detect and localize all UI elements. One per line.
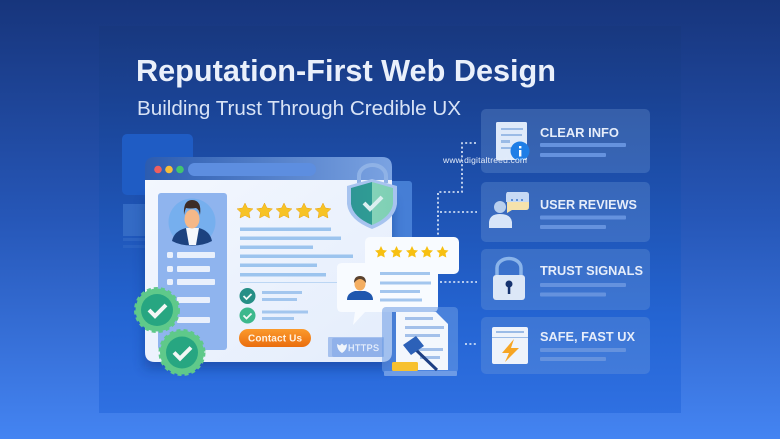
legal document with gavel [382, 307, 458, 376]
title: Reputation-First Web Design [136, 53, 556, 88]
icon: user with chat [489, 192, 529, 228]
browser chrome [145, 157, 392, 182]
reviewer icon [347, 276, 373, 300]
panel: clear info [481, 109, 650, 173]
badge: verified 1 [136, 288, 178, 332]
icon: document with info [496, 122, 530, 160]
heading: USER REVIEWS [540, 197, 637, 212]
https badge: HTTPS [348, 343, 379, 353]
decorative background panels [122, 134, 193, 248]
button: contact us [239, 329, 311, 347]
sidebar [158, 193, 227, 350]
subtitle: Building Trust Through Credible UX [137, 98, 461, 120]
panel behind shield [370, 181, 412, 241]
gavel [392, 336, 437, 371]
https badge [328, 337, 384, 357]
panel: safe, fast ux [481, 317, 650, 374]
panel: user reviews [481, 182, 650, 242]
text lines [240, 228, 353, 283]
browser page [145, 180, 392, 362]
heading: CLEAR INFO [540, 125, 619, 140]
check list [240, 288, 308, 324]
button: contact us: Contact Us [248, 334, 302, 344]
sidebar list [167, 252, 215, 323]
icon: padlock [493, 258, 525, 300]
badge: verified 2 [160, 330, 204, 374]
heading: TRUST SIGNALS [540, 263, 643, 278]
watermark: www.digitaltreed.com [442, 155, 527, 165]
rating stars [237, 203, 331, 218]
inner background panel [99, 26, 681, 413]
security shield [347, 165, 397, 229]
panel: trust signals [481, 249, 650, 310]
review card: stars [365, 237, 459, 274]
browser window [145, 157, 392, 368]
heading: SAFE, FAST UX [540, 329, 635, 344]
review card: user comment [337, 263, 438, 325]
avatar [168, 198, 216, 246]
connector: dotted lines [438, 143, 477, 344]
icon: window with lightning [492, 327, 528, 364]
